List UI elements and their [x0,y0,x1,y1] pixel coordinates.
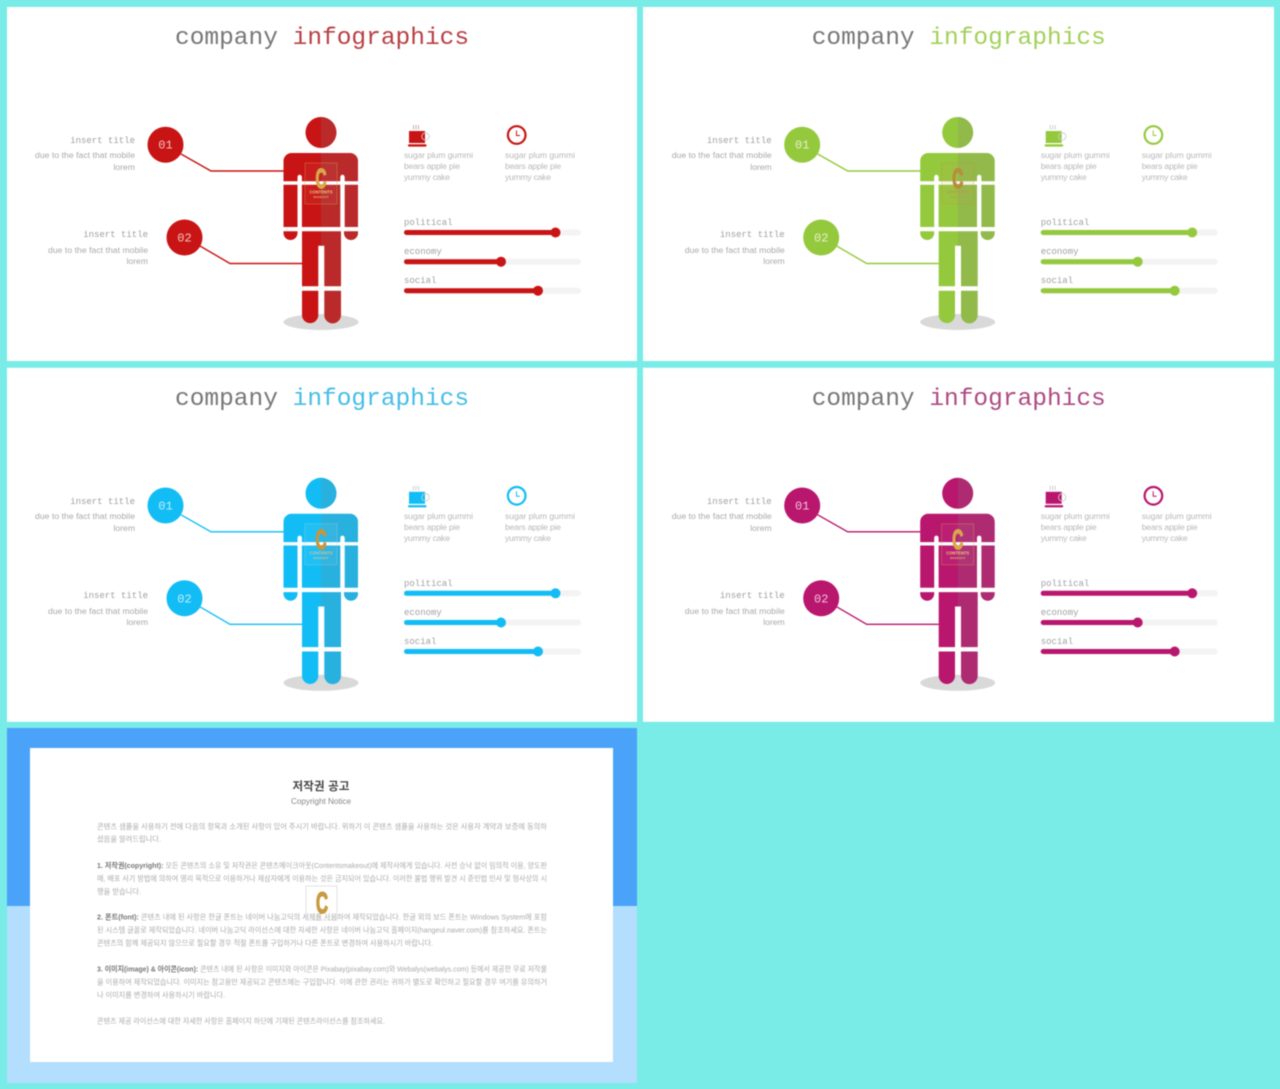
watermark logo: CONTENTS [946,190,969,194]
watermark logo: MAKEOUT [950,556,965,560]
callout 01: 01 [795,499,809,513]
section 3 text: 3. 이미지(image) & 아이콘(icon): 콘텐츠 내에 된 사항은 이미지와 아이콘은 Pixabay(pixabay.com)와 Webalys(webalys.com) 등에서 제공한 무료 저작물 [97,964,547,974]
intro text: 콘텐츠 샘플을 사용하기 전에 다음의 항목과 소개된 사항이 있어 주시기 바랍니다. 위하기 이 콘텐츠 샘플을 사용하는 것은 사용자 계약과 보증에 동의하 [97,821,547,831]
caption right [505,150,575,182]
callout 02: insert title [83,591,148,601]
icon: clock [508,487,526,505]
watermark logo: C [316,887,328,920]
callout 01: insert title [707,497,772,507]
callout 01 [672,127,921,172]
callout 02 [685,580,939,627]
caption left: sugar plum gummi [404,511,473,521]
callout 01: insert title [70,136,135,146]
caption left [404,511,473,543]
caption left: yummy cake [404,172,450,182]
caption right [505,511,575,543]
caption left: yummy cake [404,533,450,543]
title: company infographics [175,25,469,52]
bar: political: political [1041,579,1089,589]
callout 01: insert title [70,497,135,507]
human figure [920,117,995,330]
caption right: yummy cake [505,533,551,543]
callout 02 [685,220,939,266]
caption right: yummy cake [1142,172,1188,182]
title: company infographics [175,386,469,413]
callout 01 [35,488,284,533]
bar: economy [404,608,581,628]
panel: green [643,7,1274,361]
section 2 text: 콘텐츠의 함께 제공되지 않으므로 필요할 경우 적절 폰트를 구입하거나 다른 폰트로 변경하여 사용하시기 바랍니다. [97,938,433,948]
bar: social [404,276,581,296]
bar: political [1041,218,1218,238]
bar: social: social [1041,637,1073,647]
caption left: bears apple pie [404,522,460,532]
caption left: yummy cake [1041,172,1087,182]
watermark logo: CONTENTS [946,550,969,555]
callout 02: lorem [763,617,785,627]
caption left: bears apple pie [404,161,460,171]
human figure [283,478,358,691]
human figure [920,478,995,691]
callout 02: 02 [177,232,192,246]
bar: political: political [404,579,453,589]
caption left [404,150,473,182]
icon: clock [508,126,526,144]
caption left [1041,150,1110,182]
caption left: bears apple pie [1041,161,1097,171]
bar: political [404,218,581,238]
watermark logo: CONTENTS [310,550,332,555]
bar: social [404,637,581,656]
bar: economy: economy [404,247,442,257]
callout 01: due to the fact that mobile [672,150,772,160]
caption right: sugar plum gummi [505,511,575,521]
caption right: bears apple pie [505,522,561,532]
caption right [1142,511,1212,543]
caption left [1041,511,1110,543]
callout 02: due to the fact that mobile [685,245,785,255]
watermark logo [305,163,337,204]
intro text: 셨음을 알려드립니다. [97,834,161,844]
callout 01: 01 [158,138,173,152]
bar: social [1041,637,1218,656]
section 2 text: 된 시스템 글꼴로 제작되었습니다. 네이버 나눔고딕 라이선스에 대한 자세한 사항은 네이버 나눔고딕 홈페이지(hangeul.naver.com)를 참조하세요. 폰트는 [97,924,547,934]
caption left: sugar plum gummi [404,150,473,160]
callout 01: lorem [750,523,772,533]
callout 01: due to the fact that mobile [672,511,772,521]
bar: political [404,579,581,598]
icon: clock [1145,126,1162,144]
callout 02: lorem [126,617,148,627]
bar: social [1041,276,1218,296]
callout 02: insert title [83,230,148,240]
section 1 text: 행을 받습니다. [97,886,141,896]
callout 02: insert title [720,591,785,601]
bar: economy: economy [1041,608,1079,618]
section 3 text: 나 이미지를 변경하여 사용하시기 바랍니다. [97,990,225,1000]
callout 01 [35,127,284,172]
caption right: yummy cake [1142,533,1188,543]
callout 02: due to the fact that mobile [685,606,785,616]
icon: coffee cup [1045,486,1066,507]
bar: social: social [404,637,436,647]
callout 02: 02 [814,592,828,606]
human figure [283,117,358,330]
section 3 text: 을 이용하여 제작되었습니다. 이미지는 참고용만 제공되고 콘텐츠에는 구입합니다. 이에 관한 권리는 귀하가 별도로 확인하고 필요할 경우 여기를 유의하거 [97,976,547,986]
caption right: sugar plum gummi [1142,150,1212,160]
caption right: bears apple pie [1142,522,1198,532]
watermark logo: C [316,524,327,555]
title: company infographics [812,25,1106,52]
callout 02 [48,220,302,266]
closing text: 콘텐츠 제공 라이선스에 대한 자세한 사항은 홈페이지 하단에 기재된 콘텐츠라이선스를 참조하세요. [97,1016,385,1026]
caption right [1142,150,1212,182]
callout 01: lorem [114,523,135,533]
caption left: sugar plum gummi [1041,150,1110,160]
watermark logo: C [316,163,327,194]
section 1 text: 매, 배포 사기 방법에 의하여 영리 목적으로 이용하거나 제삼자에게 이용하는 것은 금지되어 있습니다. 이러한 불법 행위 발견 시 준민법 민사 및 형사상의 시 [97,873,547,883]
callout 02: lorem [763,256,785,266]
watermark logo [942,524,974,565]
icon: coffee cup [408,125,429,147]
watermark logo [942,163,974,204]
panel: magenta [643,368,1274,722]
section 1 text [97,860,547,896]
callout 01: lorem [750,162,772,172]
callout 02: 02 [177,592,192,606]
callout 01: lorem [114,162,135,172]
bar: economy: economy [1041,247,1079,257]
callout 01: due to the fact that mobile [35,511,135,521]
icon: clock [1145,487,1162,505]
bar: political: political [404,218,453,228]
intro text [97,821,547,844]
panel: red [7,7,637,361]
callout 02: insert title [720,230,785,240]
callout 01: due to the fact that mobile [35,150,135,160]
watermark logo: MAKEOUT [313,195,329,199]
icon: coffee cup [408,486,429,507]
watermark logo: CONTENTS [310,190,332,194]
callout 01: insert title [707,136,772,146]
watermark logo: C [952,163,963,194]
caption left: yummy cake [1041,533,1087,543]
bar: economy [404,247,581,267]
caption right: bears apple pie [505,161,561,171]
panel: blue [7,368,637,722]
callout 02 [48,580,302,627]
caption right: sugar plum gummi [1142,511,1212,521]
caption left: bears apple pie [1041,522,1097,532]
title: company infographics [812,386,1106,413]
callout 01: 01 [795,138,809,152]
callout 02: due to the fact that mobile [48,606,148,616]
callout 01: 01 [158,499,173,513]
watermark logo: MAKEOUT [950,195,965,199]
heading: 저작권 공고 [292,779,350,793]
watermark logo: C [952,524,963,555]
bar: economy: economy [404,608,442,618]
callout 02: lorem [126,256,148,266]
watermark logo [305,524,337,565]
bar: political [1041,579,1218,598]
caption left: sugar plum gummi [1041,511,1110,521]
callout 02: due to the fact that mobile [48,245,148,255]
icon: coffee cup [1045,125,1066,147]
bar: economy [1041,247,1218,267]
watermark logo [306,886,337,920]
bar: economy [1041,608,1218,628]
caption right: yummy cake [505,172,551,182]
caption right: sugar plum gummi [505,150,575,160]
caption right: bears apple pie [1142,161,1198,171]
section 2 text: 2. 폰트(font): 콘텐츠 내에 된 사항은 한글 폰트는 네이버 나눔고딕의 서체를 사용하여 제작되었습니다. 한글 외의 보드 폰트는 Windows System에 포함 [97,912,547,922]
section 1 text: 1. 저작권(copyright): 모든 콘텐츠의 소유 및 저작권은 콘텐츠메이크아웃(Contentsmakeout)에 제작사에게 있습니다. 사전 승낙 없이 임의적 이용, 양도판 [97,860,547,870]
bar: social: social [404,276,436,286]
section 3 text [97,964,547,1000]
watermark logo: MAKEOUT [313,556,329,560]
panel: copyright notice [7,728,637,1083]
bar: social: social [1041,276,1073,286]
bar: political: political [1041,218,1089,228]
subheading: Copyright Notice [291,797,351,806]
callout 01 [672,488,921,533]
section 2 text [97,912,547,948]
callout 02: 02 [814,232,828,246]
